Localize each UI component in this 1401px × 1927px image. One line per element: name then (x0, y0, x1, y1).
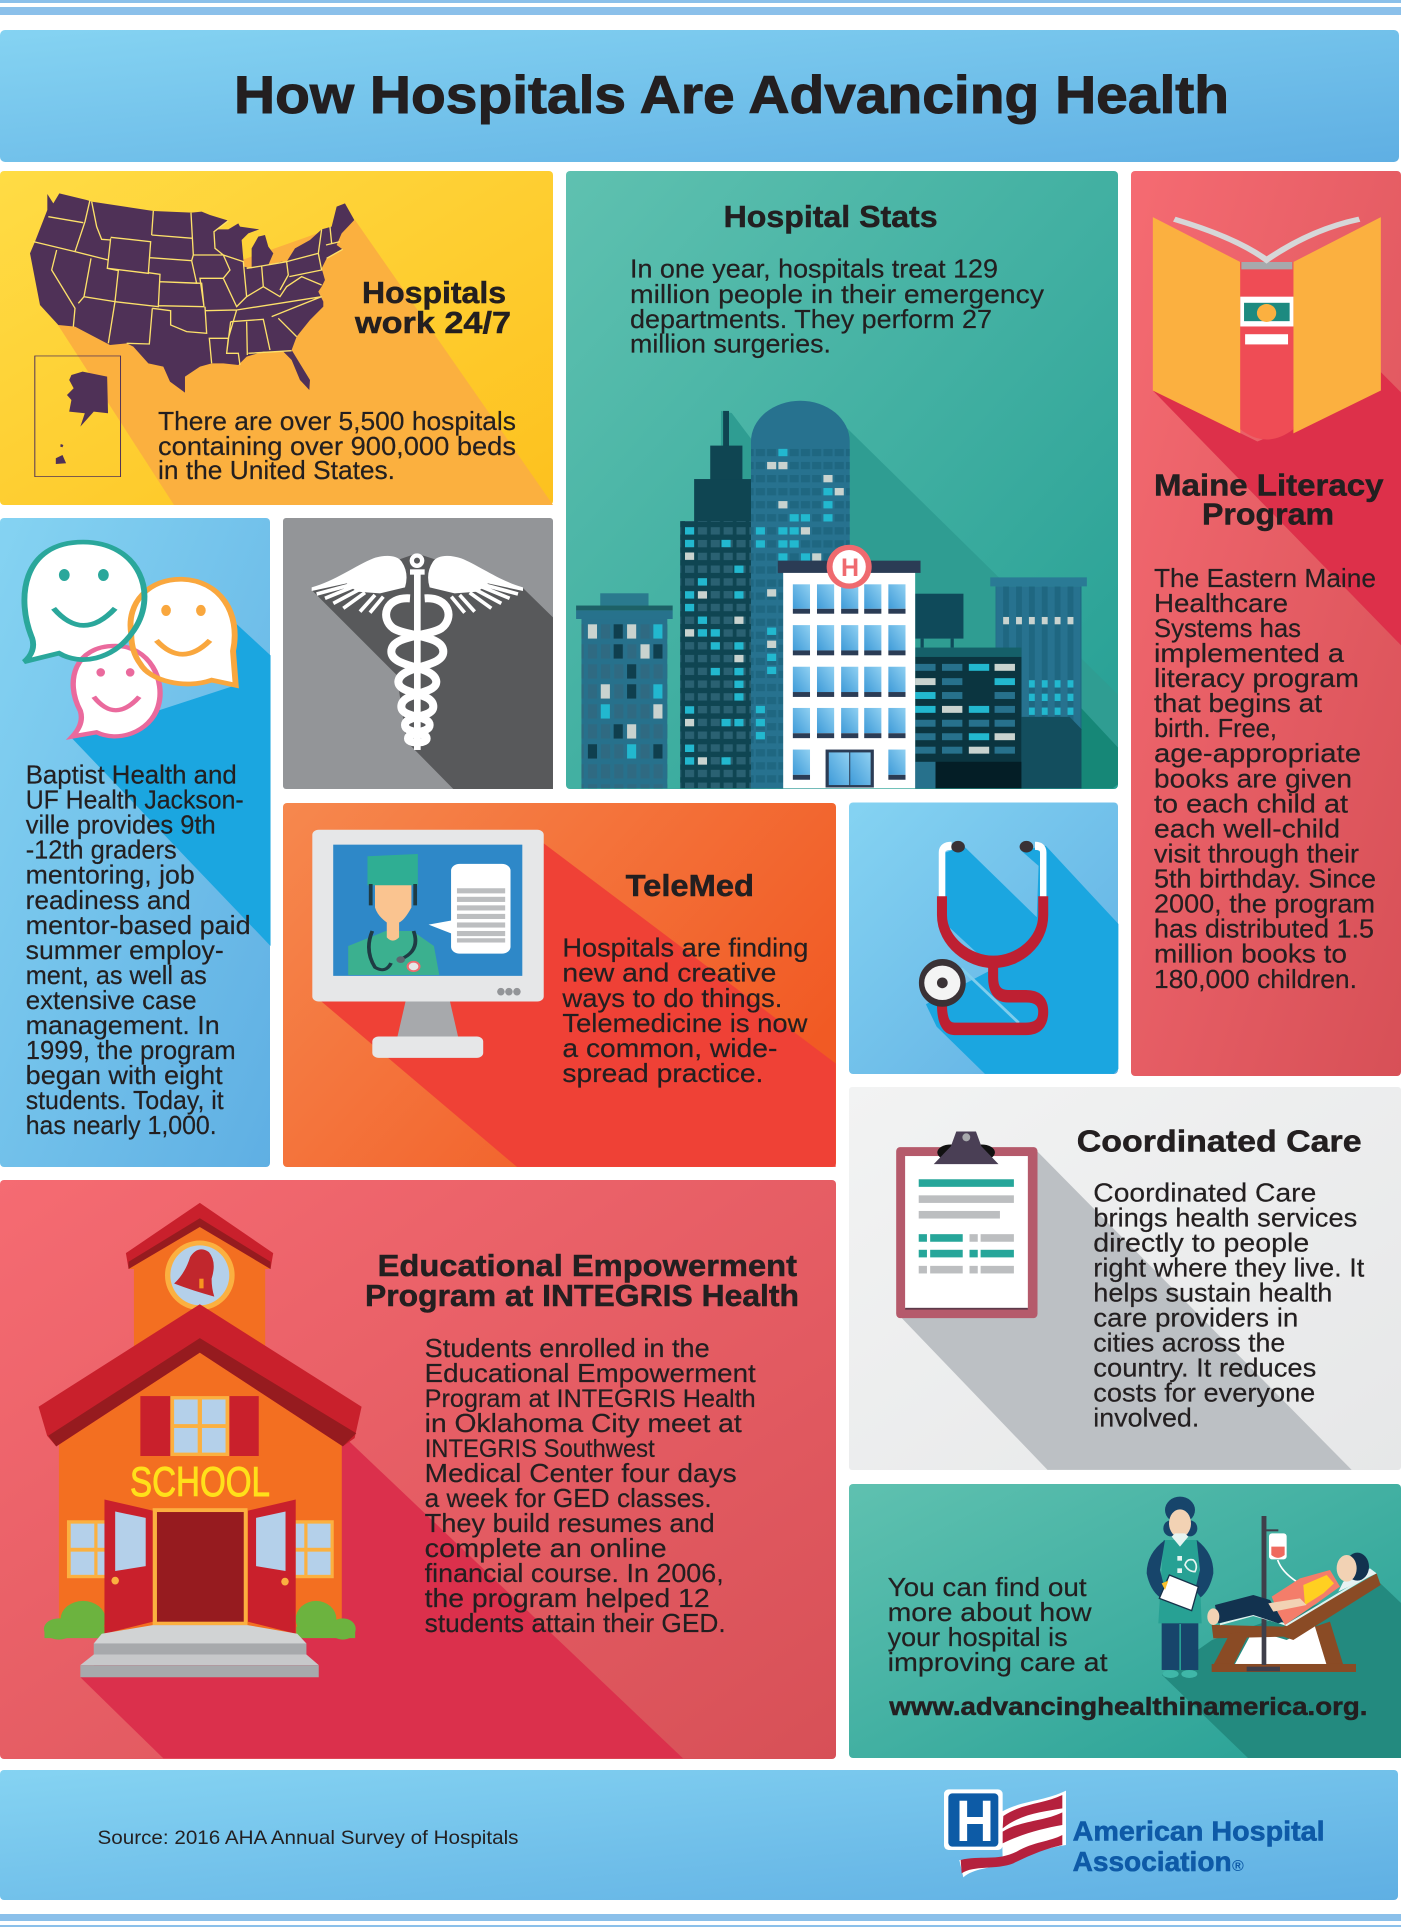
panel: title banner (0, 30, 1399, 162)
body text: UF Health Jackson- (26, 784, 244, 814)
body text (1154, 563, 1376, 994)
heading: Hospitals (362, 275, 506, 310)
body text: in Oklahoma City meet at (425, 1408, 743, 1438)
body text: a week for GED classes. (425, 1483, 712, 1513)
body text: has nearly 1,000. (26, 1110, 217, 1140)
icon: US map (30, 193, 354, 393)
icon: doctor on monitor (312, 830, 836, 1167)
body text: management. In (26, 1010, 220, 1040)
panel: footer (0, 1770, 1398, 1900)
heading (1154, 468, 1384, 532)
body text: costs for everyone (1093, 1378, 1315, 1408)
body text: students. Today, it (26, 1085, 224, 1115)
body text: your hospital is (888, 1622, 1068, 1652)
heading (354, 275, 511, 340)
body text: ville provides 9th (26, 810, 216, 840)
heading: Program (1202, 496, 1334, 532)
body text: 5th birthday. Since (1154, 864, 1376, 894)
heading: Maine Literacy (1154, 468, 1384, 502)
body text: There are over 5,500 hospitals (158, 406, 516, 436)
website link: www.advancinghealthinamerica.org. (888, 1693, 1367, 1721)
hospital sign letter: H (841, 554, 859, 582)
body text: helps sustain health (1093, 1278, 1332, 1308)
body text: extensive case (26, 985, 197, 1015)
body text (425, 1333, 757, 1638)
body text: They build resumes and (425, 1508, 715, 1538)
body text: improving care at (888, 1647, 1108, 1677)
logo: American Hospital Association: H (956, 1789, 994, 1854)
heading: Coordinated Care (1077, 1124, 1362, 1159)
body text: new and creative (562, 958, 776, 988)
body text: directly to people (1093, 1228, 1309, 1258)
body text: Students enrolled in the (425, 1333, 710, 1363)
body text: Baptist Health and (26, 760, 237, 790)
panel: hospital stats (566, 171, 1118, 789)
icon: Alaska and Hawaii inset (35, 356, 121, 477)
source note: Source: 2016 AHA Annual Survey of Hospitals (98, 1827, 519, 1849)
body text: departments. They perform 27 (630, 304, 992, 334)
title: How Hospitals Are Advancing Health (234, 66, 1229, 125)
panel: find out more (849, 1484, 1401, 1758)
body text: involved. (1093, 1403, 1199, 1433)
body text: brings health services (1093, 1203, 1357, 1233)
icon: shadow of nurse and patient (1162, 1583, 1401, 1758)
body text: million books to (1154, 939, 1347, 969)
heading: Program at INTEGRIS Health (365, 1278, 799, 1313)
body text (561, 933, 808, 1088)
body text: INTEGRIS Southwest (425, 1435, 655, 1463)
logo: American Hospital Association: ® (1232, 1858, 1244, 1875)
bottom stripes (0, 1914, 1401, 1927)
body text: care providers in (1093, 1303, 1298, 1333)
body text (888, 1572, 1108, 1677)
body text (158, 406, 516, 485)
body text: ment, as well as (26, 960, 207, 990)
body text: -12th graders (26, 835, 177, 865)
body text: Hospitals are finding (562, 933, 808, 963)
panel: Maine literacy program (1131, 171, 1401, 1076)
body text: In one year, hospitals treat 129 (630, 254, 998, 284)
body text: Telemedicine is now (562, 1008, 808, 1038)
body text: books are given (1154, 764, 1352, 794)
logo: American Hospital Association (944, 1789, 1325, 1877)
body text: country. It reduces (1093, 1353, 1316, 1383)
body text: age-appropriate (1154, 738, 1361, 768)
body text: readiness and (26, 885, 191, 915)
body text: ways to do things. (561, 983, 782, 1013)
body text: each well-child (1154, 814, 1340, 844)
icon: stethoscope (922, 841, 1118, 1074)
body text: visit through their (1154, 838, 1359, 868)
panel: Baptist Health mentoring (0, 518, 271, 1167)
logo: American Hospital Association: American Hospital (1073, 1816, 1325, 1847)
panel: TeleMed (283, 803, 836, 1167)
panel: stethoscope (849, 802, 1118, 1074)
panel: hospitals work 24/7 (0, 171, 553, 505)
icon: school house (39, 1203, 683, 1758)
body text: a common, wide- (562, 1033, 777, 1063)
body text: containing over 900,000 beds (158, 431, 516, 461)
icon: city skyline with hospital (576, 401, 1118, 788)
icon: smiley speech bubbles (24, 542, 271, 946)
body text (630, 254, 1044, 359)
body text: cities across the (1093, 1328, 1285, 1358)
body text: right where they live. It (1093, 1253, 1365, 1283)
body text: Coordinated Care (1093, 1178, 1316, 1208)
heading: TeleMed (626, 868, 754, 903)
body text: students attain their GED. (425, 1608, 726, 1638)
body text: implemented a (1154, 638, 1345, 668)
icon: nurse and patient (1147, 1497, 1381, 1678)
body text: financial course. In 2006, (425, 1558, 724, 1588)
panel: educational empowerment (0, 1180, 836, 1759)
body text: 180,000 children. (1154, 964, 1357, 994)
body text: mentor-based paid (26, 910, 251, 940)
body text: Healthcare (1154, 588, 1288, 618)
body text: began with eight (26, 1060, 223, 1090)
body text: complete an online (425, 1533, 667, 1563)
body text: to each child at (1154, 788, 1349, 818)
panel: coordinated care (849, 1087, 1401, 1470)
body text: that begins at (1154, 688, 1323, 718)
body text: You can find out (888, 1572, 1087, 1602)
body text: the program helped 12 (425, 1583, 710, 1613)
heading: Hospital Stats (724, 199, 938, 234)
school sign: SCHOOL (130, 1458, 270, 1505)
body text: The Eastern Maine (1154, 563, 1376, 593)
icon: open book with shadow (1153, 217, 1401, 646)
body text: million surgeries. (630, 329, 831, 359)
body text (26, 760, 251, 1140)
body text: spread practice. (562, 1058, 763, 1088)
body text: Educational Empowerment (425, 1358, 757, 1388)
body text: Medical Center four days (425, 1458, 737, 1488)
body text: has distributed 1.5 (1154, 914, 1374, 944)
body text: million people in their emergency (630, 279, 1044, 309)
body text: 1999, the program (26, 1035, 236, 1065)
body text: Program at INTEGRIS Health (425, 1385, 756, 1413)
icon: map shadow (58, 220, 553, 505)
icon: caduceus (312, 553, 553, 789)
heading: work 24/7 (354, 305, 511, 340)
body text: in the United States. (158, 455, 395, 485)
body text: mentoring, job (26, 860, 195, 890)
body text (1093, 1178, 1365, 1433)
body text: birth. Free, (1154, 713, 1277, 743)
heading: Educational Empowerment (378, 1248, 797, 1283)
heading (365, 1248, 799, 1313)
body text: summer employ- (26, 935, 224, 965)
icon: clipboard (896, 1131, 1352, 1470)
logo: American Hospital Association: Association (1073, 1846, 1232, 1877)
body text: literacy program (1154, 663, 1359, 693)
body text: 2000, the program (1154, 889, 1375, 919)
body text: more about how (888, 1597, 1092, 1627)
top stripes (0, 0, 1401, 15)
panel: caduceus (283, 518, 553, 789)
body text: Systems has (1154, 613, 1301, 643)
